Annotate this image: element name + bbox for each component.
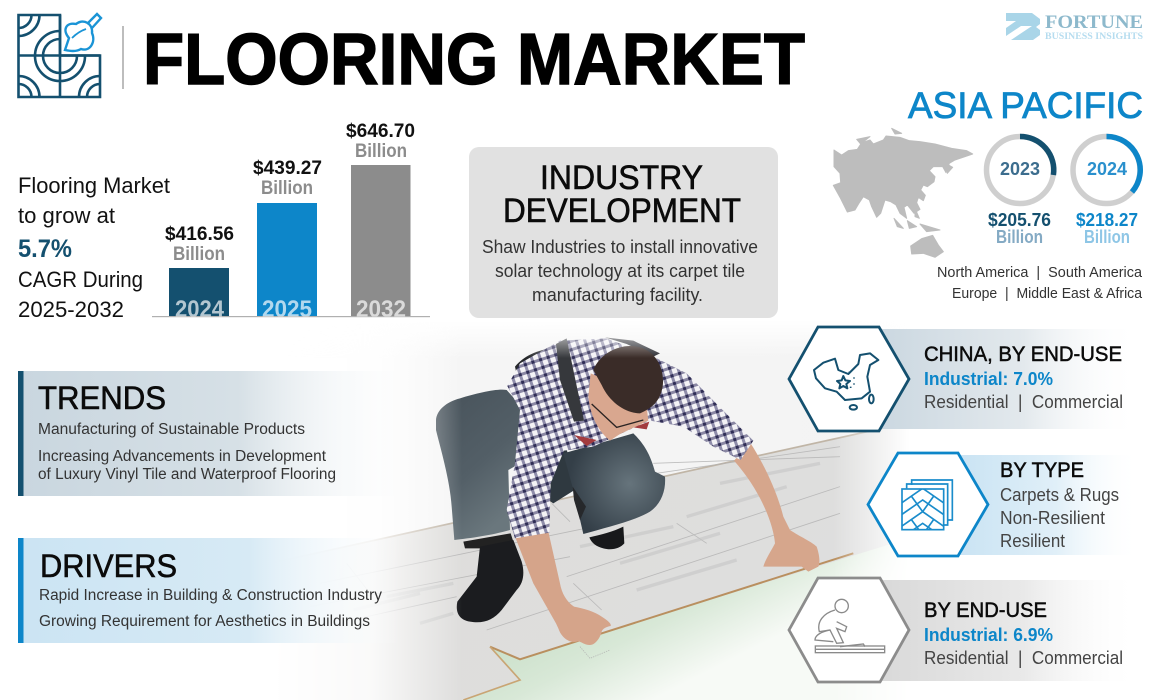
- regional values: $205.76: [988, 210, 1051, 230]
- regional values: [988, 210, 1138, 247]
- bar chart: market size: 2024: [175, 296, 224, 323]
- panel: China by end-use: Industrial: 7.0%: [924, 369, 1053, 389]
- panel: by end-use: Residential | Commercial: [924, 648, 1123, 668]
- panel: industry development: DEVELOPMENT: [503, 192, 741, 230]
- donut: 2023: 2023: [1000, 159, 1040, 179]
- bar chart: market size: 2032: [356, 296, 406, 323]
- brand logo: Fortune Business Insights: FORTUNE: [1045, 12, 1143, 33]
- photo: worker laying floor planks: [353, 337, 891, 700]
- panel: industry development: manufacturing facility.: [532, 285, 703, 305]
- panel: drivers: Growing Requirement for Aesthetics in Buildings: [39, 613, 370, 630]
- bar chart: market size: Billion: [261, 177, 313, 199]
- panel: industry development: Shaw Industries to install innovative: [482, 237, 758, 257]
- panel: industry development: [469, 147, 778, 318]
- bar chart: market size: $646.70: [346, 120, 415, 142]
- panel: by end-use: [789, 578, 1140, 682]
- panel: by type: [868, 453, 1140, 556]
- other regions: Europe | Middle East & Africa: [952, 286, 1143, 302]
- brand logo: Fortune Business Insights: BUSINESS INSIGHTS: [1045, 32, 1143, 42]
- donut: 2024: 2024: [1087, 159, 1127, 179]
- panel: industry development: solar technology at its carpet tile: [495, 261, 745, 281]
- bar chart: market size: Billion: [355, 140, 407, 162]
- bar chart: market size: 2025: [262, 296, 312, 323]
- panel: drivers: DRIVERS: [40, 548, 177, 584]
- donut: 2024: [1073, 136, 1140, 204]
- panel: by end-use: BY END-USE: [924, 599, 1047, 622]
- panel: industry development: INDUSTRY: [540, 159, 703, 197]
- panel: trends: Increasing Advancements in Development: [38, 448, 327, 465]
- panel: China by end-use: CHINA, BY END-USE: [924, 343, 1122, 366]
- bar chart: market size: $439.27: [253, 157, 322, 179]
- CAGR text block: CAGR During: [18, 267, 143, 292]
- icon: floor tiles: [901, 479, 954, 530]
- CAGR text block: Flooring Market: [18, 173, 171, 198]
- panel: by type: BY TYPE: [1000, 459, 1084, 482]
- title: FLOORING MARKET: [143, 20, 805, 100]
- icon: floor installer: [815, 599, 885, 653]
- heading: Asia Pacific: ASIA PACIFIC: [908, 85, 1143, 126]
- logo icon: tile and trowel: [17, 12, 103, 98]
- regional values: Billion: [1084, 227, 1130, 247]
- panel: by type: Carpets & Rugs: [1000, 485, 1119, 505]
- regional values: $218.27: [1076, 210, 1138, 230]
- panel: drivers: [18, 538, 403, 643]
- bar chart: market size: [152, 120, 430, 323]
- other regions: [937, 265, 1143, 302]
- panel: by type: Resilient: [1000, 531, 1065, 551]
- bar chart: market size: $416.56: [165, 223, 234, 245]
- panel: China by end-use: Residential | Commercial: [924, 392, 1123, 412]
- panel: drivers: Rapid Increase in Building & Construction Industry: [39, 587, 382, 604]
- panel: trends: [18, 371, 418, 496]
- panel: trends: TRENDS: [38, 380, 166, 416]
- brand logo: Fortune Business Insights: [1006, 12, 1143, 42]
- icon: China map: [814, 353, 878, 410]
- CAGR text block: [18, 173, 171, 322]
- CAGR text block: 5.7%: [18, 235, 72, 263]
- other regions: North America | South America: [937, 265, 1143, 281]
- map: Asia Pacific: [833, 128, 973, 257]
- donut: 2023: [986, 136, 1054, 204]
- bar chart: market size: Billion: [173, 243, 225, 265]
- panel: trends: of Luxury Vinyl Tile and Waterproof Flooring: [38, 466, 336, 483]
- man: [436, 337, 819, 645]
- panel: trends: Manufacturing of Sustainable Products: [38, 421, 305, 438]
- CAGR text block: 2025-2032: [18, 297, 124, 322]
- header divider: [122, 26, 124, 89]
- panel: China by end-use: [789, 327, 1140, 431]
- panel: by end-use: Industrial: 6.9%: [924, 625, 1053, 645]
- panel: by type: Non-Resilient: [1000, 508, 1105, 528]
- regional values: Billion: [996, 227, 1043, 247]
- CAGR text block: to grow at: [18, 203, 116, 228]
